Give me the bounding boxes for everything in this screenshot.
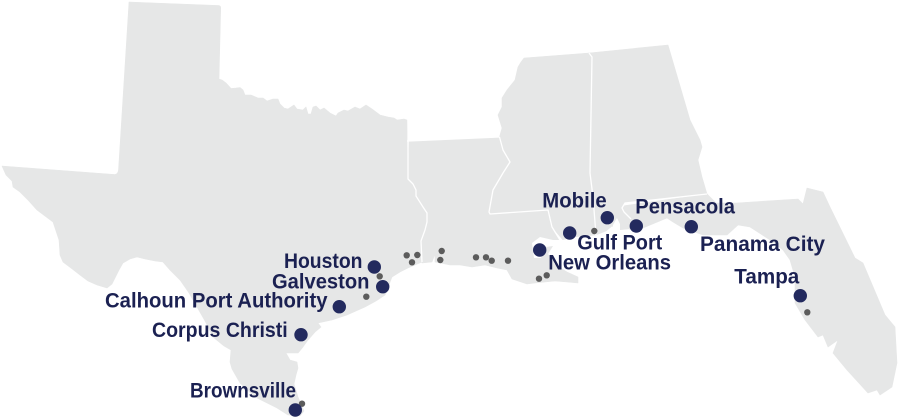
- port labels: Corpus Christi: [152, 319, 288, 342]
- state: Alabama: [589, 45, 707, 235]
- port labels: Pensacola: [635, 196, 735, 219]
- port labels: Brownsville: [190, 380, 296, 403]
- port labels: Galveston: [272, 271, 370, 294]
- port labels: Tampa: [734, 265, 800, 288]
- port labels: Panama City: [700, 233, 825, 256]
- state: Louisiana: [408, 137, 578, 284]
- port labels: New Orleans: [548, 252, 671, 275]
- state: Mississippi: [489, 53, 596, 240]
- water: Lake Pontchartrain and Mississippi Sound: [532, 237, 572, 258]
- port labels: Gulf Port: [577, 231, 662, 254]
- port markers: secondary ports: [299, 228, 810, 407]
- state borders: [407, 53, 707, 262]
- port labels: Houston: [284, 250, 362, 273]
- state: Florida: [622, 188, 897, 395]
- port markers: named ports: [289, 211, 807, 417]
- state: Texas: [2, 2, 427, 416]
- water: Mobile Bay: [612, 218, 620, 233]
- port labels: Calhoun Port Authority: [105, 289, 328, 312]
- port labels: [105, 189, 825, 403]
- port labels: Mobile: [542, 189, 607, 212]
